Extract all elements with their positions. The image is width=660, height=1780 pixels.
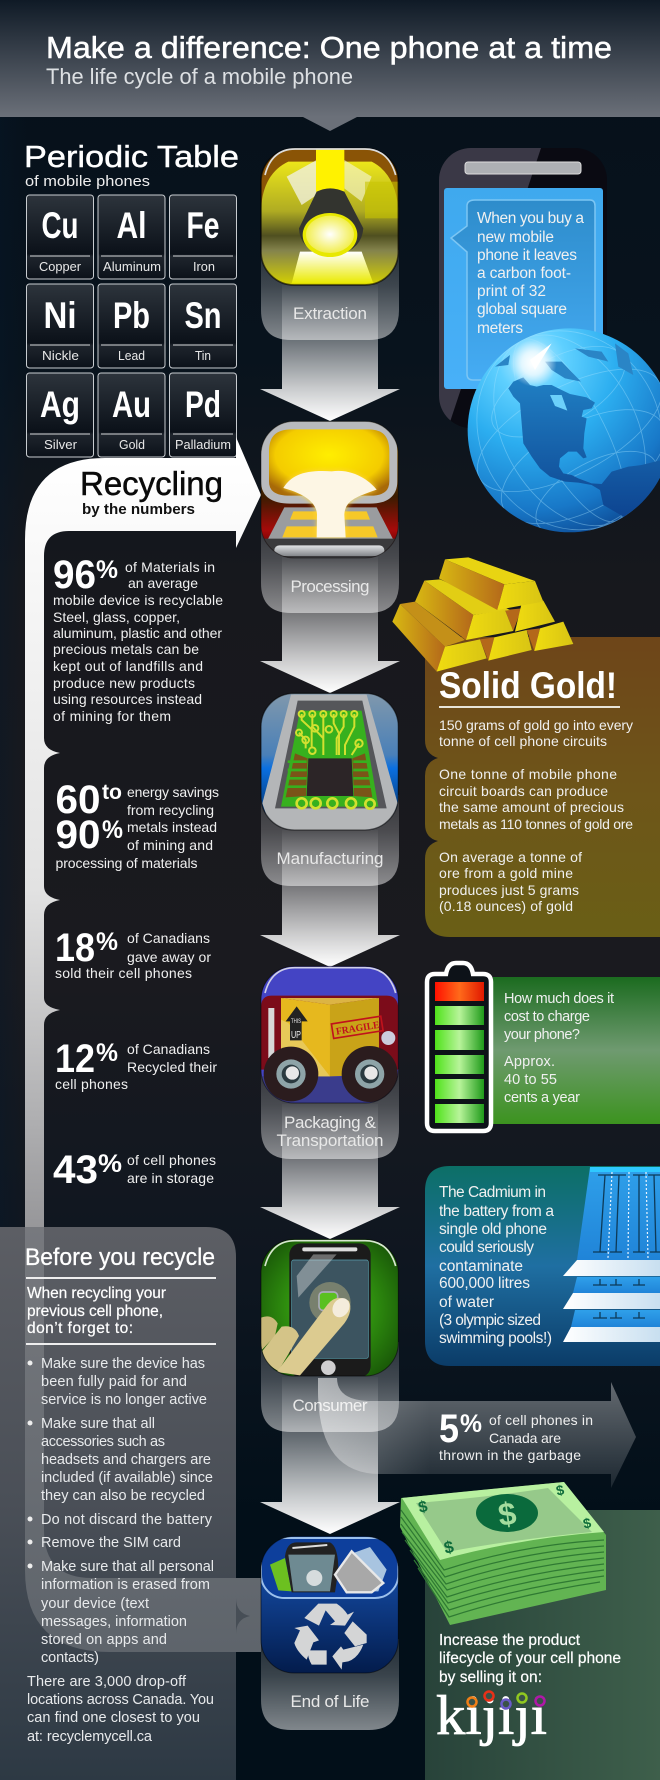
drop-off note: There are 3,000 drop-off [27, 1674, 187, 1690]
periodic table tiles: Nickle [42, 348, 79, 363]
kijiji logo: kijiji [436, 1685, 547, 1747]
stat: 60 to 90 percent [56, 778, 219, 871]
periodic table tiles: Ag [40, 384, 80, 425]
stat: 60 to 90 percent: to [102, 781, 122, 804]
periodic table tiles: Al [116, 205, 146, 246]
stat: 18 percent: sold their cell phones [55, 965, 192, 981]
cadmium text: contaminate [439, 1258, 523, 1275]
periodic table tiles: Lead [118, 348, 145, 363]
white recycling arrow and bar [25, 437, 261, 1240]
stage labels: Processing [290, 577, 370, 596]
icon: cardboard box on wheels (packaging): THIS [291, 1019, 301, 1025]
stat: 60 to 90 percent: processing of materials [56, 855, 198, 871]
speech bubble [451, 200, 595, 380]
icon: gold bars [392, 557, 573, 672]
stat: 12 percent: of Canadians [127, 1041, 210, 1057]
stat: 96 percent: Steel, glass, copper, [53, 609, 180, 625]
stat: 96 percent: of mining for them [53, 708, 171, 724]
message text: When you buy a [477, 210, 584, 227]
gold facts: ore from a gold mine [439, 865, 573, 881]
icon: recycling bin (end of life) [261, 1536, 398, 1673]
icon: stack of money: $ [555, 1481, 566, 1499]
stat: 96 percent: of Materials in [125, 559, 215, 575]
panel: sell on kijiji [400, 1481, 660, 1780]
cadmium text: the battery from a [439, 1203, 554, 1220]
stat: 43 percent: % [98, 1150, 122, 1178]
stat: 96 percent: kept out of landfills and [53, 658, 203, 674]
bullet list: they can also be recycled [41, 1488, 205, 1504]
stat: 43 percent: of cell phones [127, 1152, 216, 1168]
intro: don’t forget to: [27, 1320, 133, 1337]
header banner [0, 0, 660, 131]
intro: previous cell phone, [27, 1303, 163, 1320]
stat: 60 to 90 percent: energy savings [127, 784, 219, 800]
stage labels: Transportation [276, 1131, 384, 1150]
stat: 12 percent: cell phones [55, 1076, 128, 1092]
stat: 12 percent: Recycled their [127, 1059, 217, 1075]
periodic table tiles: Aluminum [103, 259, 161, 274]
icon: cardboard box on wheels (packaging): FRAGILE [335, 1020, 381, 1038]
periodic table tiles: Sn [184, 295, 222, 336]
charging text: Approx. [504, 1054, 555, 1070]
stat: 18 percent [55, 926, 211, 981]
bullet list: contacts) [41, 1650, 99, 1666]
flow arrows [260, 285, 400, 1534]
icon: cardboard box on wheels (packaging): UP [291, 1030, 301, 1041]
icon: miner's lamp (extraction) [261, 148, 398, 285]
arrow: 5 percent thrown in the garbage [318, 1378, 636, 1488]
phone with carbon footprint message [439, 148, 607, 428]
curved band to end of life [25, 1227, 261, 1652]
stat: 12 percent: 12 [55, 1037, 95, 1081]
heading: periodic table [24, 139, 239, 190]
stage labels: Extraction [293, 304, 367, 323]
bullet list: included (if available) since [41, 1470, 213, 1486]
panel: before you recycle [0, 1227, 261, 1780]
cadmium text: swimming pools!) [439, 1330, 552, 1347]
periodic table tiles: Ni [44, 295, 76, 336]
cadmium text: The Cadmium in [439, 1184, 546, 1201]
periodic table tiles: Palladium [175, 437, 231, 452]
periodic table tiles: Tin [195, 348, 211, 363]
drop-off note: at: recyclemycell.ca [27, 1729, 153, 1745]
periodic table tiles: Copper [39, 259, 82, 274]
periodic table tiles: Au [112, 384, 151, 425]
charging text: 40 to 55 [504, 1072, 557, 1088]
panel: charging cost [493, 977, 660, 1124]
bullet list: information is erased from [41, 1577, 210, 1593]
gold facts: 150 grams of gold go into every [439, 717, 633, 733]
stat: 60 to 90 percent: of mining and [127, 837, 213, 853]
message text: phone it leaves [477, 247, 577, 264]
stat: 60 to 90 percent: 60 [56, 778, 100, 822]
stat: 96 percent: using resources instead [53, 691, 202, 707]
charging text [504, 991, 614, 1106]
bullet list: headsets and chargers are [41, 1452, 211, 1468]
icon: furnace (processing) [261, 421, 398, 559]
stat: 43 percent: are in storage [127, 1170, 214, 1186]
charging text: How much does it [504, 991, 614, 1007]
intro [26, 1277, 216, 1345]
stat: 60 to 90 percent: from recycling [127, 802, 214, 818]
periodic table tiles: Fe [186, 205, 220, 246]
stat: 96 percent: produce new products [53, 675, 195, 691]
charging text: your phone? [504, 1027, 580, 1043]
message text: meters [477, 320, 523, 337]
stage label panels [261, 250, 399, 1730]
gold facts: produces just 5 grams [439, 882, 579, 898]
stat: 96 percent: 96 [53, 553, 96, 597]
icon: stack of money: $ [442, 1537, 456, 1558]
cadmium text: single old phone [439, 1221, 547, 1238]
periodic table tiles: Iron [193, 259, 215, 274]
icon: stack of money [400, 1481, 606, 1625]
stat: 12 percent: % [96, 1039, 118, 1067]
bullet list: been fully paid for and [41, 1374, 187, 1390]
bullet list [28, 1356, 214, 1666]
periodic table tiles [26, 195, 236, 457]
call to action text: by selling it on: [439, 1669, 542, 1686]
heading: recycling by the numbers [80, 465, 223, 518]
stage labels [276, 304, 384, 1711]
message text [477, 210, 584, 337]
intro: When recycling your [27, 1285, 166, 1302]
gold facts: metals as 110 tonnes of gold ore [439, 816, 633, 832]
periodic table tiles: Silver [44, 437, 78, 452]
message text: a carbon foot- [477, 265, 571, 282]
charging text: cost to charge [504, 1009, 590, 1025]
stat text: thrown in the garbage [439, 1447, 581, 1463]
heading: periodic table: of mobile phones [25, 173, 150, 190]
periodic table tiles: Cu [42, 205, 78, 246]
stat text: % [460, 1410, 482, 1438]
cadmium text [439, 1184, 554, 1347]
heading: Solid Gold! [439, 665, 617, 706]
stat text: Canada are [489, 1430, 561, 1446]
gold facts: the same amount of precious [439, 799, 624, 815]
bullet list: Do not discard the battery [41, 1512, 213, 1528]
icon: circuit board (manufacturing) [261, 693, 398, 831]
bullet list: messages, information [41, 1614, 187, 1630]
stat: 43 percent: 43 [53, 1148, 98, 1192]
icon: battery [427, 963, 491, 1131]
bullet list: accessories such as [41, 1434, 165, 1450]
icon: stack of money: $ [496, 1495, 519, 1533]
stat: 12 percent [55, 1037, 217, 1092]
message text: new mobile [477, 229, 554, 246]
stat: 60 to 90 percent: % [102, 816, 123, 844]
message text: print of 32 [477, 283, 546, 300]
gold facts: tonne of cell phone circuits [439, 733, 607, 749]
icon: finger on smartphone (consumer) [261, 1239, 398, 1377]
stat: 96 percent: mobile device is recyclable [53, 592, 223, 608]
gold facts: One tonne of mobile phone [439, 766, 617, 782]
panel: cadmium [425, 1166, 660, 1366]
drop-off note: locations across Canada. You [27, 1692, 214, 1708]
message text: global square [477, 301, 567, 318]
call to action text [439, 1632, 621, 1686]
bullet list: Make sure that all personal [41, 1559, 214, 1575]
stat: 96 percent: aluminum, plastic and other [53, 625, 222, 641]
cadmium text: of water [439, 1294, 494, 1311]
stage labels: Packaging & [284, 1113, 377, 1132]
stage labels: Consumer [292, 1396, 368, 1415]
call to action text: lifecycle of your cell phone [439, 1650, 621, 1667]
stat: 18 percent: % [96, 928, 118, 956]
icon: globe [468, 328, 660, 532]
bullet list: stored on apps and [41, 1632, 167, 1648]
stat: 18 percent: of Canadians [127, 930, 210, 946]
stat text: of cell phones in [489, 1412, 593, 1428]
gold facts [439, 717, 633, 914]
stat: 18 percent: gave away or [127, 949, 211, 965]
bullet list: service is no longer active [41, 1392, 207, 1408]
icon: cardboard box on wheels (packaging) [261, 966, 398, 1103]
stat: 18 percent: 18 [55, 926, 95, 970]
gold facts: (0.18 ounces) of gold [439, 898, 573, 914]
drop-off note [27, 1674, 214, 1745]
bullet list: Remove the SIM card [41, 1535, 181, 1551]
heading: Before you recycle [25, 1244, 215, 1271]
cadmium text: (3 olympic sized [439, 1312, 541, 1329]
stat: 96 percent: precious metals can be [53, 641, 199, 657]
stage labels: Manufacturing [276, 849, 384, 868]
subtitle: The life cycle of a mobile phone [46, 64, 353, 89]
cadmium text: could seriously [439, 1239, 534, 1256]
charging text: cents a year [504, 1090, 580, 1106]
stat: 96 percent: % [96, 556, 118, 584]
heading: recycling by the numbers: Recycling [80, 465, 223, 502]
stat: 43 percent [53, 1148, 216, 1192]
call to action text: Increase the product [439, 1632, 581, 1649]
panel: solid gold [425, 637, 660, 937]
title: Make a difference: One phone at a time [46, 30, 612, 65]
icon: stack of money: $ [417, 1498, 429, 1517]
icon: stacked swimming pools [563, 1167, 660, 1342]
stat: 96 percent: an average [128, 575, 198, 591]
periodic table tiles: Gold [119, 437, 145, 452]
icon: stack of money: $ [582, 1514, 593, 1532]
heading: periodic table: Periodic Table [24, 139, 239, 174]
stat: 96 percent [53, 553, 223, 724]
gold facts: circuit boards can produce [439, 783, 608, 799]
stat: 60 to 90 percent: metals instead [127, 819, 217, 835]
cadmium text: 600,000 litres [439, 1275, 530, 1292]
bullet list: Make sure the device has [41, 1356, 205, 1372]
bullet list: your device (text [41, 1596, 149, 1612]
panel: recycling stats background [44, 531, 236, 1240]
heading: recycling by the numbers: by the numbers [82, 501, 195, 518]
periodic table tiles: Pd [185, 384, 221, 425]
gold facts: On average a tonne of [439, 849, 582, 865]
stage labels: End of Life [290, 1692, 370, 1711]
bullet list: Make sure that all [41, 1416, 155, 1432]
drop-off note: can find one closest to you [27, 1710, 200, 1726]
stat text [439, 1407, 593, 1463]
stat text: 5 [439, 1407, 459, 1451]
periodic table tiles: Pb [113, 295, 150, 336]
stat: 60 to 90 percent: 90 [56, 813, 100, 857]
